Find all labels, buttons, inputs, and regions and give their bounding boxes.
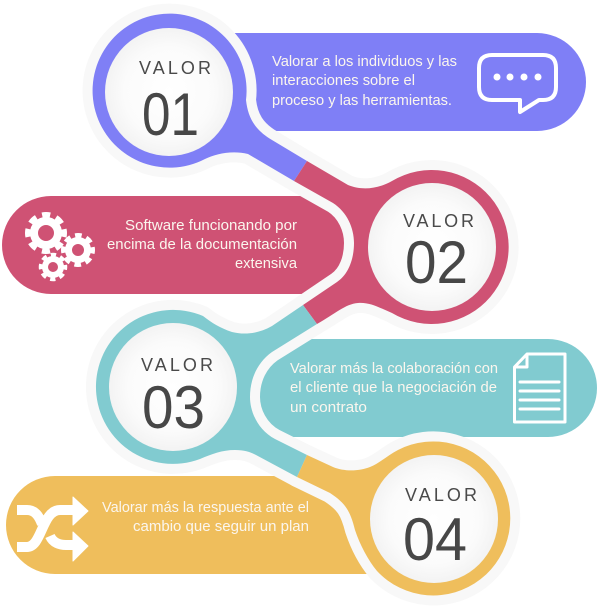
text: valor 1 description: Valorar a los individuos y las [272, 54, 457, 70]
badge: valor 03: 03 [142, 374, 205, 441]
badge: valor 01: 01 [142, 81, 199, 148]
icon: gears [28, 215, 92, 279]
badge: valor 03 [109, 323, 237, 451]
text: valor 1 description [272, 54, 457, 109]
ring: valor 3 [96, 305, 317, 477]
badge: valor 04 [370, 455, 498, 583]
text: valor 3 description: un contrato [290, 400, 367, 416]
text: valor 2 description: encima de la documentación [107, 237, 297, 253]
text: valor 1 description: proceso y las herramientas. [272, 93, 452, 109]
text: valor 2 description [107, 218, 298, 272]
text: valor 3 description: Valorar más la colaboración con [290, 361, 498, 377]
connector halos [93, 14, 510, 595]
badge: valor 02: VALOR [403, 211, 474, 231]
badge: valor 02 [368, 183, 496, 311]
text: valor 1 description: interacciones sobre el [272, 73, 415, 89]
text: valor 4 description: Valorar más la respuesta ante el [102, 500, 309, 516]
ring: valor 2 [294, 161, 509, 324]
ring: valor 4 [297, 441, 510, 595]
badge: valor 01 [105, 28, 233, 156]
badge: valor 04: VALOR [405, 485, 477, 505]
icon: speech bubble [479, 55, 556, 112]
text: valor 3 description: el cliente que la negociación de [290, 380, 497, 396]
panel: valor 1 pill [230, 33, 586, 131]
text: valor 4 description [102, 500, 309, 535]
badge: valor 02: 02 [405, 229, 468, 296]
text: valor 2 description: Software funcionando por [125, 218, 297, 234]
panel: valor 2 pill [2, 196, 360, 294]
text: valor 2 description: extensiva [235, 256, 298, 272]
text: valor 3 description [290, 361, 498, 416]
badge: valor 03: VALOR [141, 355, 213, 375]
icon: document [514, 354, 565, 422]
badge: valor 04: 04 [403, 506, 467, 573]
panel: valor 3 pill [240, 339, 597, 437]
icon: shuffle arrows [17, 497, 88, 561]
badge: valor 01: VALOR [139, 58, 211, 78]
ring: valor 1 [93, 14, 307, 181]
text: valor 4 description: cambio que seguir un plan [133, 519, 309, 535]
panel: valor 4 pill [6, 476, 372, 574]
